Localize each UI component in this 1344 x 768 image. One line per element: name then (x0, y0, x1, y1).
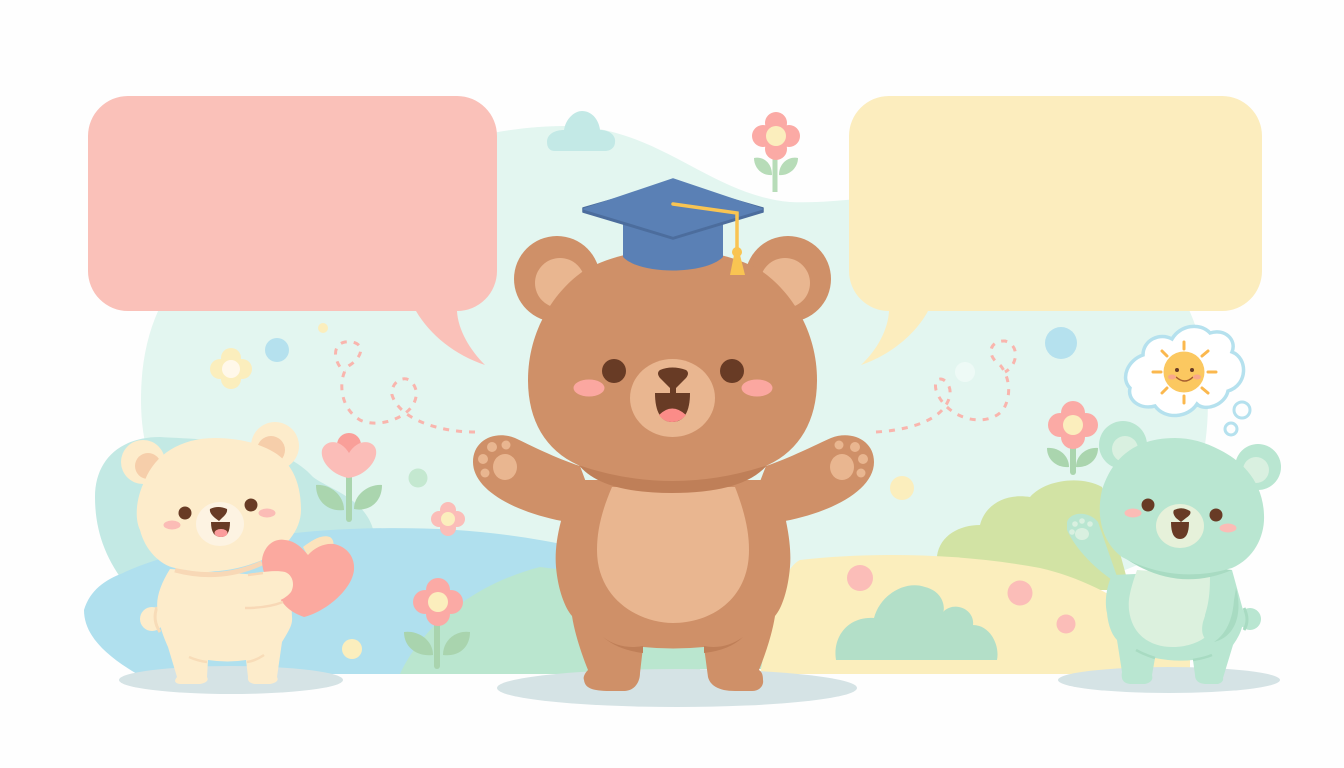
collar (175, 563, 262, 575)
collar (1122, 556, 1232, 579)
hand behind heart (303, 536, 334, 560)
ground shadows (119, 666, 1280, 707)
cloud (547, 111, 615, 151)
hill: yellow (760, 555, 1190, 674)
speech bubble: pink (88, 96, 497, 365)
ears (514, 236, 600, 322)
thought bubble (1126, 326, 1244, 416)
tail (140, 607, 164, 632)
speech bubble: yellow (849, 96, 1262, 365)
decorative dots (265, 323, 1250, 659)
ears (121, 440, 165, 484)
body and legs (556, 480, 790, 691)
flower: right (1047, 401, 1098, 472)
belly (597, 487, 749, 623)
tail (1239, 608, 1261, 630)
head (137, 438, 301, 572)
bear: green, right (1067, 421, 1281, 684)
dashed path left (336, 342, 475, 432)
background mint blob (141, 126, 1208, 620)
bear: cream, left (121, 422, 354, 684)
flower: tulip (316, 433, 382, 519)
muzzle (630, 359, 715, 437)
body and legs (157, 569, 292, 684)
arms (473, 435, 600, 521)
background teal blob left (95, 437, 375, 600)
arm (245, 571, 293, 608)
hill: green (400, 567, 800, 674)
bush: olive (937, 480, 1130, 590)
hill: blue pond (84, 528, 600, 674)
bush: green (835, 585, 998, 660)
paw pads (478, 440, 868, 480)
body and legs (1106, 570, 1243, 684)
flower: bottom left (404, 578, 470, 666)
arm waving (1067, 514, 1120, 585)
flower: yellow (210, 348, 252, 389)
graduation cap (583, 179, 763, 275)
ears (1099, 421, 1147, 469)
heart (262, 540, 354, 617)
bear: main brown with graduation cap (473, 179, 874, 691)
icon: sun (1153, 342, 1216, 403)
dashed path right (876, 341, 1016, 432)
belly (1129, 570, 1210, 647)
arm right (1202, 590, 1239, 642)
flower: top (752, 112, 800, 192)
collar (578, 464, 768, 493)
head (1100, 438, 1264, 574)
flower: small pink (431, 502, 465, 536)
head (528, 250, 817, 481)
